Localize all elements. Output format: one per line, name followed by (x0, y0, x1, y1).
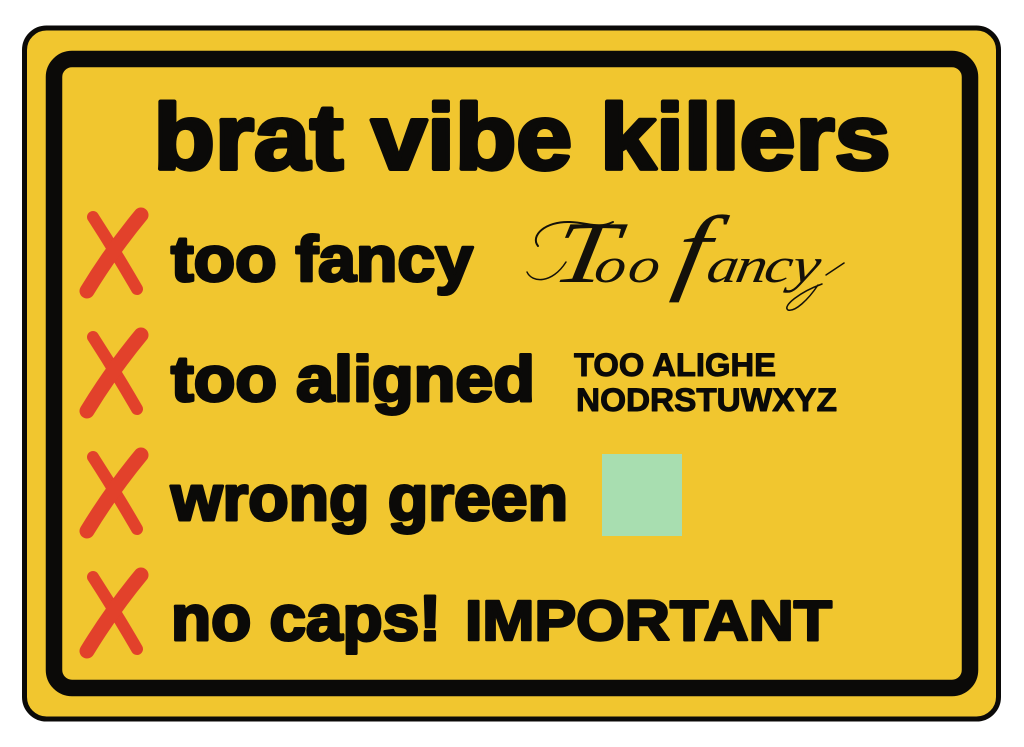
example: green swatch (602, 454, 682, 536)
row 4: no caps (87, 575, 832, 654)
icon: red X (87, 575, 141, 651)
script flourishes (527, 222, 844, 310)
example: uppercase alphabet (574, 347, 837, 418)
label: no caps!: no caps! (171, 582, 441, 654)
icon: red X (87, 335, 141, 411)
row 2: too aligned (87, 335, 837, 418)
inner border band (54, 59, 970, 688)
icon: red X (87, 455, 141, 531)
icon: red X (87, 215, 141, 291)
example: script font (527, 197, 844, 310)
label: too fancy: too fancy (171, 223, 473, 295)
label: too aligned: too aligned (171, 343, 535, 415)
row 3: wrong green (87, 454, 682, 536)
title: brat vibe killers (154, 85, 890, 189)
label: wrong green: wrong green (170, 462, 568, 534)
example: script font: ancy (703, 238, 826, 293)
example: IMPORTANT: IMPORTANT (465, 589, 832, 653)
example: script font: T (547, 204, 632, 301)
example: uppercase alphabet: TOO ALIGHE (574, 347, 776, 383)
row 1: too fancy (87, 197, 844, 310)
example: uppercase alphabet: NODRSTUWXYZ (576, 382, 837, 418)
example: script font: oo (590, 238, 665, 293)
example: script font: f (668, 197, 733, 303)
